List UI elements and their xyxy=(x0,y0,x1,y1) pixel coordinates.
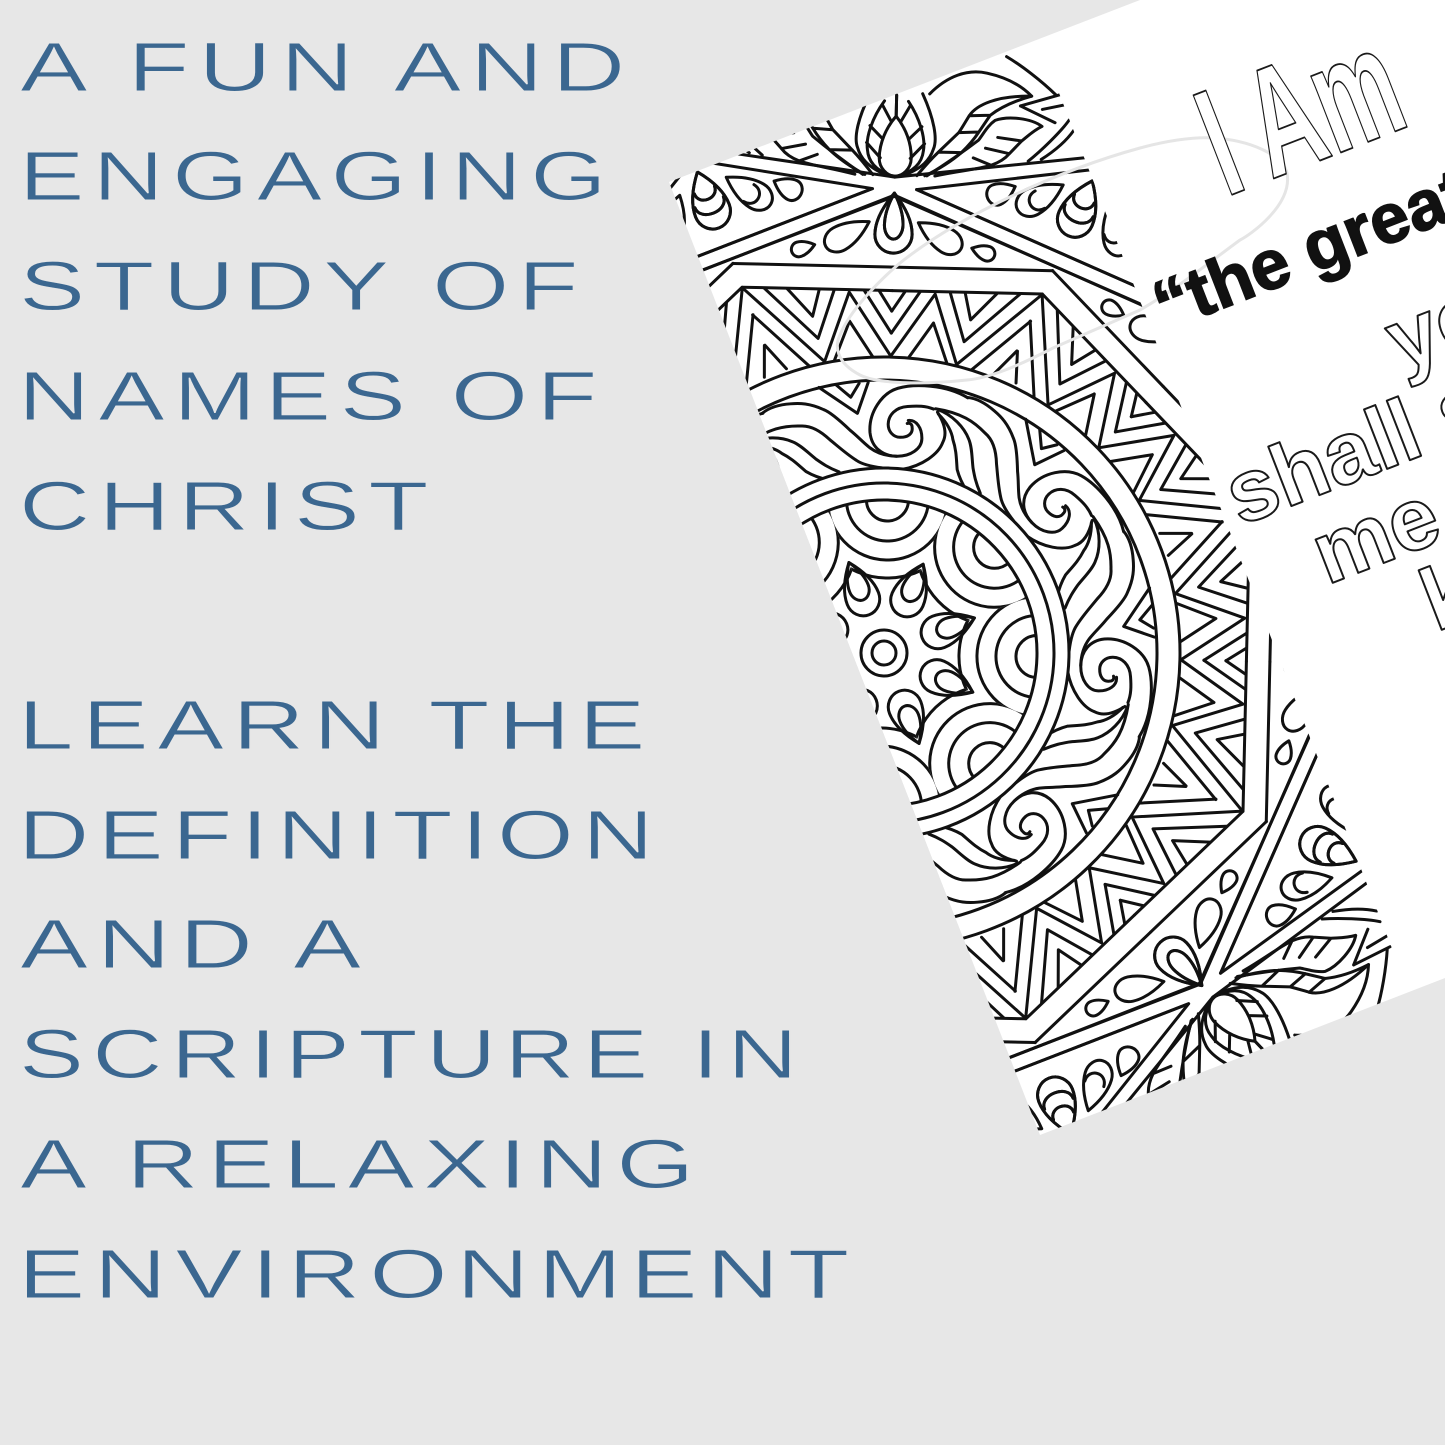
heading line 5: CHRIST xyxy=(19,467,437,545)
text block: study description xyxy=(18,28,858,1313)
heading line 1: A FUN AND xyxy=(20,28,634,106)
mandala coloring artwork xyxy=(670,55,1400,1130)
heading line 4: NAMES OF xyxy=(18,357,606,435)
page sheet xyxy=(669,0,1445,1135)
body line 4: SCRIPTURE IN xyxy=(19,1015,806,1093)
body line 5: A RELAXING xyxy=(20,1125,703,1203)
heading line 3: STUDY OF xyxy=(19,247,587,325)
body line 2: DEFINITION xyxy=(18,796,662,874)
panel: tilted coloring page xyxy=(669,0,1445,1135)
heading line 2: ENGAGING xyxy=(19,137,615,215)
body line 1: LEARN THE xyxy=(18,686,654,764)
body line 3: AND A xyxy=(20,905,370,983)
body line 6: ENVIRONMENT xyxy=(18,1235,858,1313)
faint loop ornament xyxy=(837,138,1288,383)
